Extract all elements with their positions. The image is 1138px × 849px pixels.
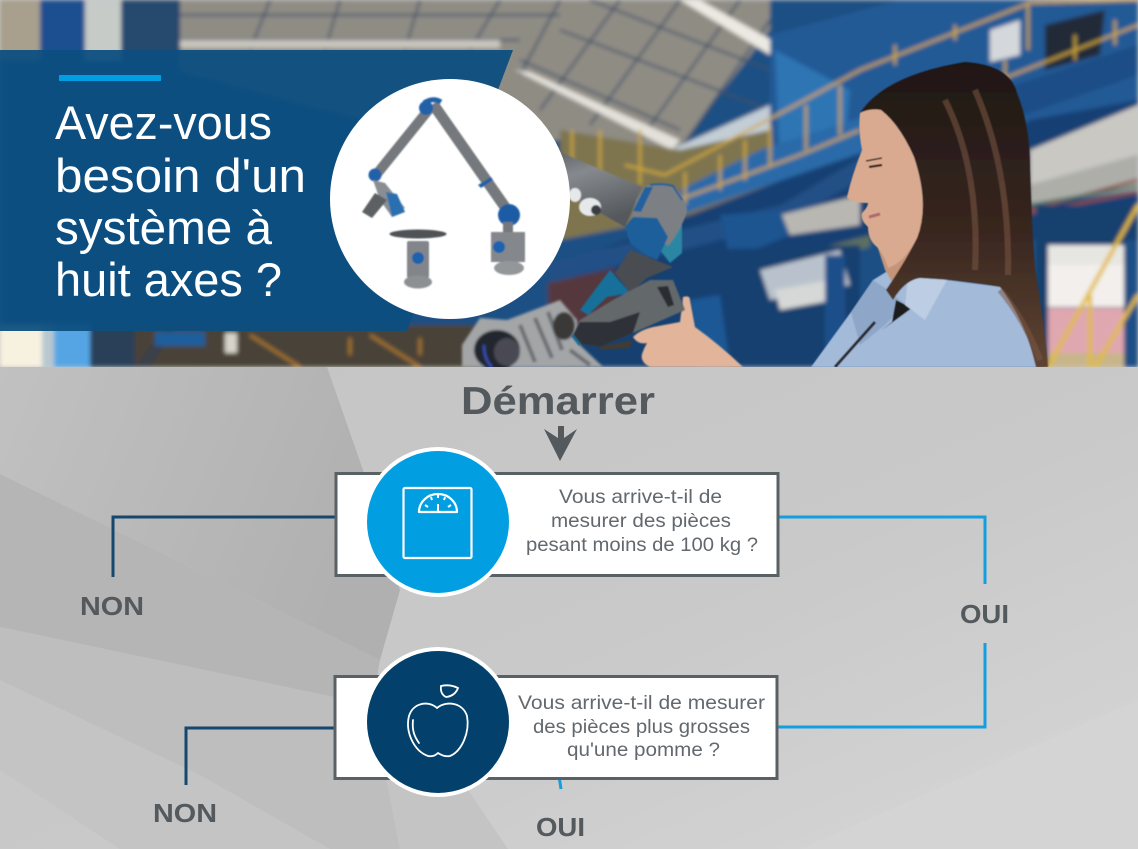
photo: factory background with operator <box>0 0 1138 370</box>
panel: question two <box>335 649 777 795</box>
factory hall background <box>0 0 1138 367</box>
connector: first question no <box>113 517 336 577</box>
question two text: des pièces plus grosses <box>533 716 750 738</box>
heading: start: Démarrer <box>461 380 655 423</box>
hair highlights <box>945 90 1040 360</box>
face <box>847 109 923 268</box>
product disc: arm and rotary table <box>330 79 570 319</box>
icon: apple <box>365 649 511 795</box>
label: oui 1: OUI <box>960 599 1009 629</box>
connector: first question yes <box>778 517 985 584</box>
connector: yes into second question <box>778 643 985 727</box>
title <box>55 96 306 306</box>
arrow: start to first question <box>544 426 577 461</box>
question one text: pesant moins de 100 kg ? <box>526 534 758 556</box>
question one text: mesurer des pièces <box>551 510 731 532</box>
label: oui 2: OUI <box>536 812 585 842</box>
question two text: qu'une pomme ? <box>567 739 720 761</box>
neck <box>878 228 920 282</box>
connector: second question yes <box>559 776 561 789</box>
title: besoin d'un <box>55 149 306 202</box>
hand holding scanner <box>633 296 743 367</box>
engine block workpiece <box>462 300 603 370</box>
question two text <box>518 692 766 761</box>
title: Avez-vous <box>55 96 272 149</box>
question one text: Vous arrive-t-il de <box>559 486 722 508</box>
flowchart background <box>0 367 1138 849</box>
hair back <box>860 62 1048 367</box>
title: huit axes ? <box>55 253 282 306</box>
icon: measuring arm <box>362 100 525 289</box>
question two text: Vous arrive-t-il de mesurer <box>518 692 766 714</box>
accent bar <box>59 75 161 81</box>
connector: second question no <box>186 728 335 785</box>
shirt <box>811 272 1036 367</box>
question one text <box>526 486 758 556</box>
rotary table <box>390 230 446 238</box>
panel: question one <box>336 449 778 595</box>
icon: weighing scale <box>365 449 511 595</box>
banner: translucent blue title panel <box>0 50 513 331</box>
title: système à <box>55 201 273 254</box>
label: non 1: NON <box>80 591 144 621</box>
operator woman <box>811 62 1048 367</box>
label: non 2: NON <box>153 798 217 828</box>
robot arm held by operator <box>555 150 687 350</box>
